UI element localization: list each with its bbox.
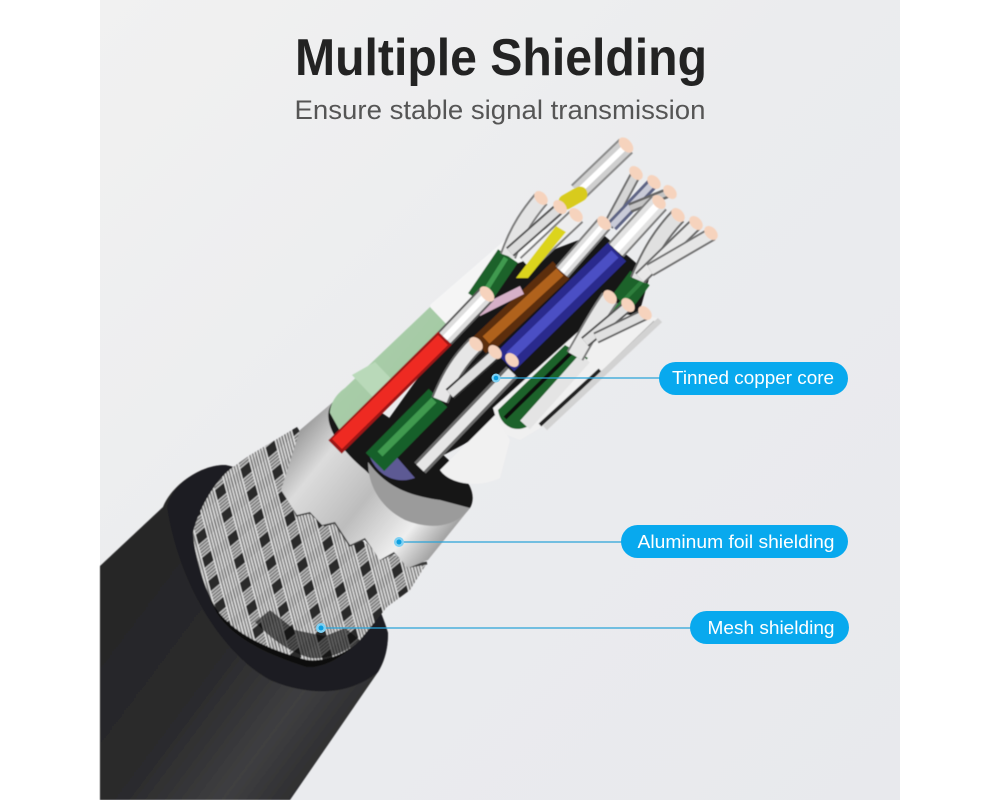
dark bundle interior — [370, 232, 650, 465]
aluminum foil shield — [281, 402, 473, 568]
callout: tinned copper core — [492, 362, 848, 395]
callout: mesh shielding: Mesh shielding — [708, 617, 834, 638]
conductor group D — [616, 203, 659, 250]
white foil lower centre tube — [420, 372, 512, 484]
long edge strip — [545, 320, 660, 428]
green lower left wire — [375, 398, 438, 462]
callout: aluminum foil shielding — [394, 525, 848, 558]
top conductor — [578, 146, 626, 192]
title: Multiple Shielding — [295, 29, 707, 87]
silver conductor bundles — [445, 146, 712, 338]
white foil right tube — [493, 312, 660, 440]
pale pink wire — [478, 290, 522, 312]
subtitle: Ensure stable signal transmission — [294, 95, 706, 125]
braided mesh shield — [193, 427, 427, 660]
green upper wire — [478, 256, 508, 300]
background panel — [100, 0, 900, 800]
lower right conductors — [575, 298, 646, 356]
brown wire — [480, 270, 561, 347]
conductor group E — [638, 216, 712, 280]
green right upper wire — [600, 242, 680, 325]
frayed conductor group C — [608, 174, 670, 226]
callout: aluminum foil shielding: Aluminum foil shielding — [638, 531, 834, 552]
lower centre conductors — [440, 344, 496, 400]
white foil sleeve upper — [330, 228, 555, 440]
yellow wire — [516, 194, 580, 278]
conductor group B — [562, 224, 604, 272]
blue wire — [505, 252, 617, 362]
wires — [335, 146, 712, 484]
red wire conductor — [445, 294, 487, 338]
conductor group A — [508, 199, 577, 264]
cable illustration — [100, 135, 720, 800]
black outer jacket — [100, 465, 388, 800]
callout: tinned copper core: Tinned copper core — [672, 367, 834, 388]
red wire — [335, 338, 445, 447]
callout: mesh shielding — [316, 611, 849, 644]
copper tips — [467, 135, 720, 370]
